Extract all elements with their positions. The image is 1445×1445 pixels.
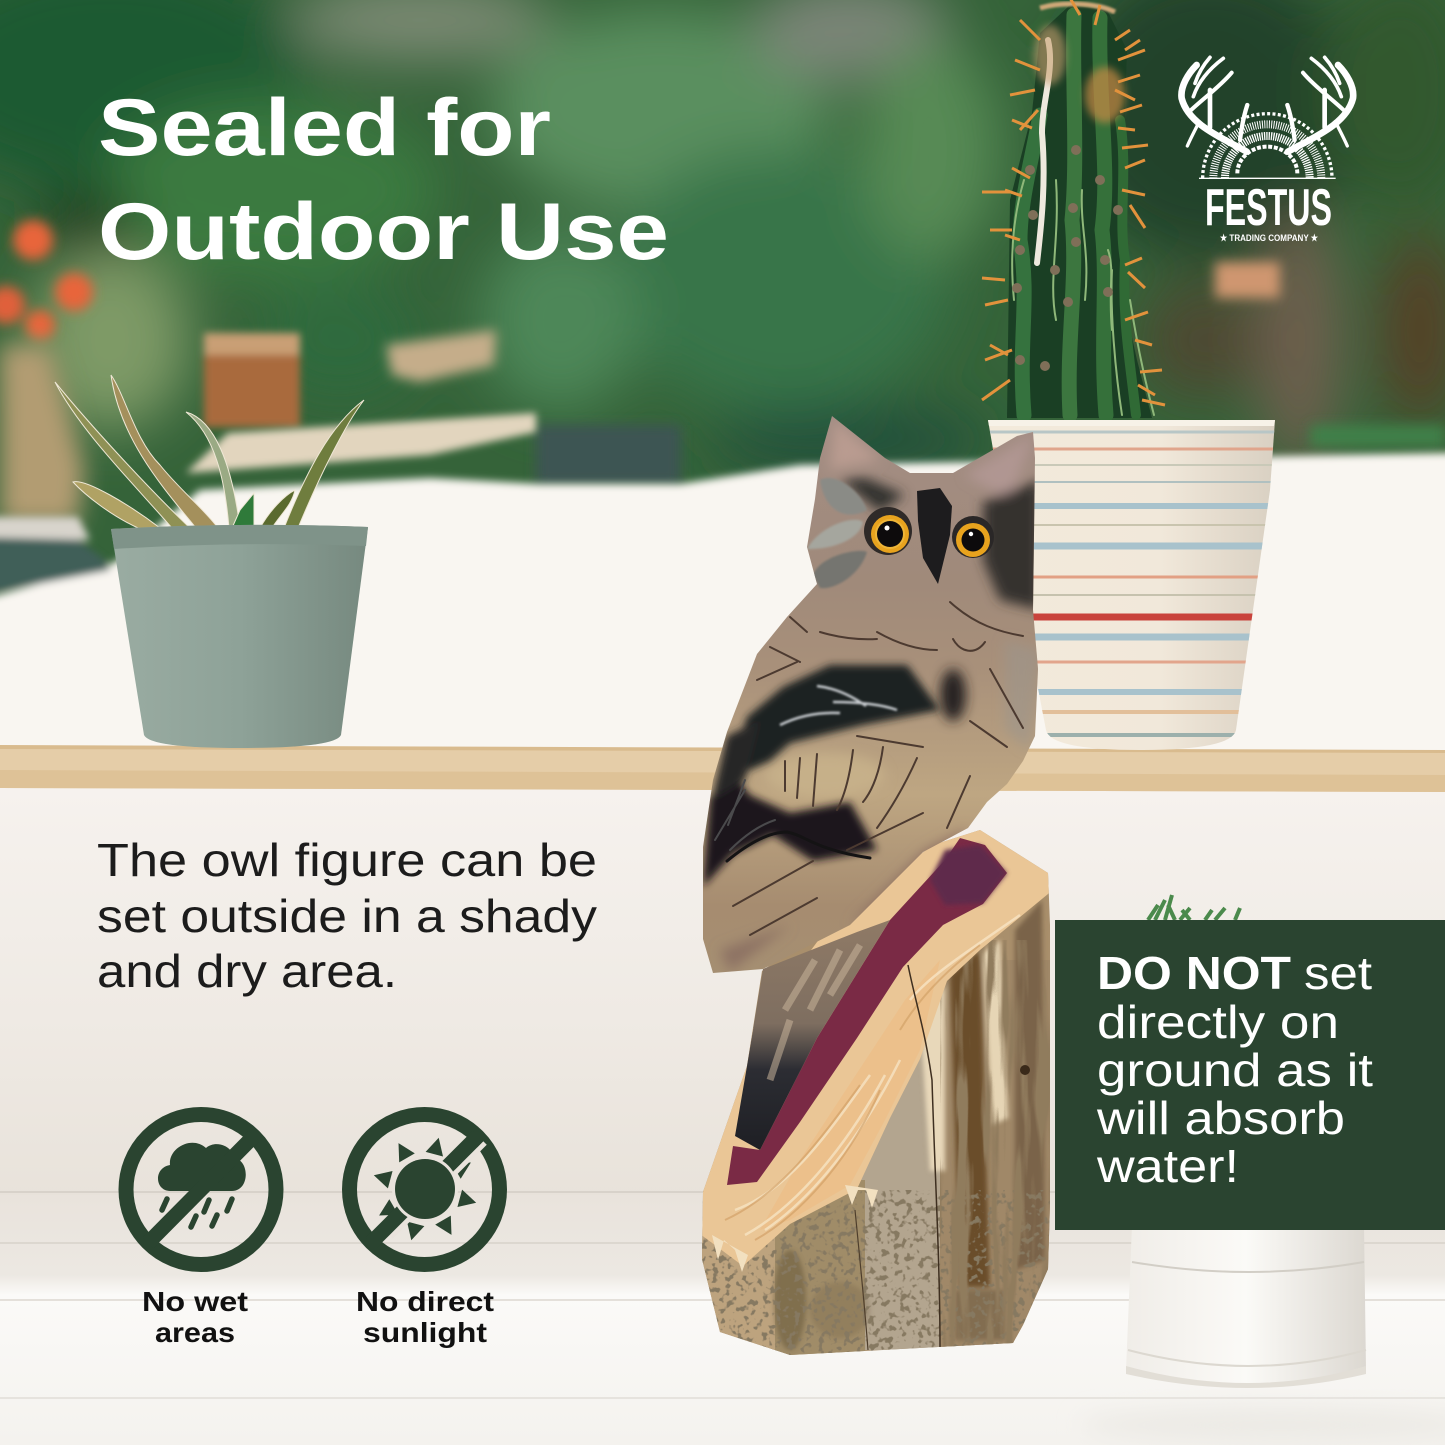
striped pot bbox=[985, 420, 1280, 750]
body text: The owl figure can be bbox=[97, 834, 597, 886]
body text: set outside in a shady bbox=[97, 890, 597, 942]
icon: no direct sunlight bbox=[350, 1114, 500, 1264]
icon label: no direct sunlight bbox=[356, 1286, 494, 1348]
log light cut bbox=[700, 825, 1060, 1266]
background: floor planks bbox=[0, 1192, 1445, 1445]
left green pot bbox=[111, 525, 368, 748]
logo: Festus Trading Company bbox=[1181, 57, 1353, 244]
icon label: no direct sunlight: No direct bbox=[356, 1286, 494, 1317]
panel: warning callout: water! bbox=[1096, 1140, 1239, 1192]
white bucket bbox=[1126, 1225, 1366, 1388]
small plant in bucket bbox=[1148, 895, 1240, 920]
logo: wordmark: FESTUS bbox=[1205, 179, 1332, 237]
owl figure bbox=[703, 416, 1040, 973]
icon: no wet areas bbox=[126, 1114, 276, 1264]
owl wing dark bands bbox=[727, 665, 940, 780]
body text bbox=[97, 834, 597, 997]
owl beak bbox=[917, 488, 952, 584]
owl eye right bbox=[952, 516, 994, 558]
background: blurred garden bbox=[0, 0, 1445, 800]
aloe plant bbox=[55, 375, 364, 528]
background: white terrace bbox=[0, 413, 1445, 760]
purple heartwood bbox=[727, 838, 1007, 1185]
body text: and dry area. bbox=[97, 945, 397, 997]
title: Sealed for bbox=[98, 83, 551, 173]
cactus bbox=[982, 0, 1165, 418]
owl tail feathers bbox=[735, 920, 890, 1150]
background: wall bbox=[0, 785, 1445, 1205]
panel: warning callout bbox=[1055, 920, 1445, 1230]
panel: warning callout: ground as it bbox=[1097, 1044, 1373, 1096]
owl eye left bbox=[864, 507, 912, 555]
log bark zones bbox=[700, 900, 1055, 1360]
icon label: no direct sunlight: sunlight bbox=[363, 1317, 487, 1348]
panel: warning callout: will absorb bbox=[1096, 1092, 1345, 1144]
panel: warning callout: set bbox=[1304, 947, 1372, 999]
panel: warning callout: DO NOT bbox=[1097, 947, 1291, 999]
owl log bbox=[700, 825, 1060, 1360]
icon label: no wet areas: areas bbox=[155, 1317, 235, 1348]
panel: warning callout: directly on bbox=[1097, 996, 1339, 1048]
icon label: no wet areas bbox=[142, 1286, 248, 1348]
logo: tagline: ★ TRADING COMPANY ★ bbox=[1220, 233, 1318, 244]
logo: stump and antlers bbox=[1181, 57, 1353, 178]
ledge bbox=[0, 745, 1445, 792]
title: Outdoor Use bbox=[98, 187, 669, 277]
title bbox=[98, 83, 669, 277]
icon label: no wet areas: No wet bbox=[142, 1286, 248, 1317]
